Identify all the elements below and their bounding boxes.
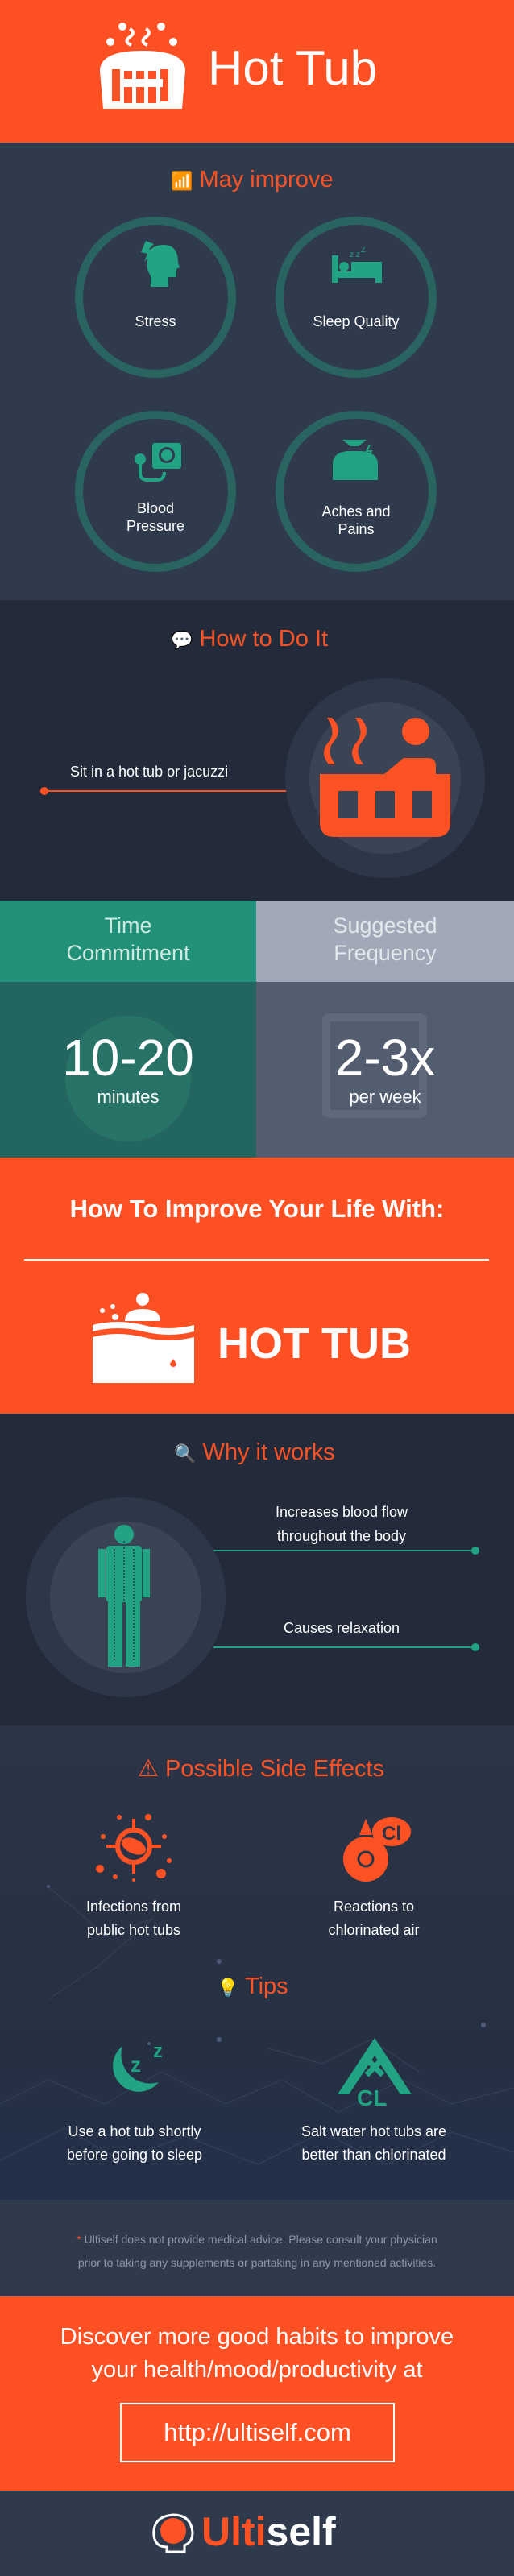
panel: suggested frequency: Frequency [334, 941, 437, 965]
text: reactions [328, 1899, 420, 1938]
circle: sleep quality: z z [350, 251, 360, 259]
heading: how to improve: How To Improve Your Life With: [70, 1195, 444, 1223]
text: sit in a hot tub: Sit in a hot tub or jacuzzi [70, 764, 228, 780]
heading: possible side effects: ⚠ Possible Side Effects [138, 1756, 384, 1782]
circle: blood pressure: Blood [137, 500, 174, 516]
panel: may improve [0, 143, 514, 600]
panel: suggested frequency: Suggested [333, 913, 437, 938]
heading: hot tub: HOT TUB [218, 1319, 411, 1368]
panel: time commitment: Time [105, 913, 151, 938]
icon: chlorine [343, 1817, 411, 1882]
header [0, 0, 514, 143]
call to action: Discover more good habits to improve [60, 2324, 454, 2350]
icon: hot tub in circles [285, 678, 485, 878]
panel: why it works [0, 1414, 514, 1725]
panel: time commitment: Commitment [66, 941, 190, 965]
circle: aches and pains: Pains [338, 521, 375, 537]
circle: blood pressure [75, 411, 236, 572]
panel: time commitment: minutes [97, 1087, 160, 1107]
icon: moon zzz [113, 2041, 163, 2092]
circle: aches and pains: Aches and [321, 503, 391, 520]
call to action: your health/mood/productivity at [91, 2357, 423, 2383]
disclaimer [0, 2200, 514, 2296]
text: infections [86, 1899, 181, 1938]
call to action [0, 2296, 514, 2491]
panel: how to do it [0, 600, 514, 901]
panel: how to improve banner [0, 1158, 514, 1414]
circle: stress: Stress [135, 313, 176, 329]
text: increases blood flow: Increases blood flow [276, 1504, 408, 1520]
panel: suggested frequency: per week [349, 1087, 421, 1107]
heading: may improve: 📶 May improve [171, 167, 333, 193]
heading: how to do it: 💬 How to Do It [171, 626, 328, 652]
icon: chlorine: Cl [382, 1823, 401, 1845]
panel: suggested frequency: 2-3x [335, 1029, 435, 1087]
icon: person in tub [93, 1293, 194, 1383]
text: increases blood flow: throughout the body [277, 1528, 406, 1544]
circle: aches and pains [276, 411, 437, 572]
icon: hot tub steam [100, 23, 185, 109]
text: infections: public hot tubs [87, 1922, 180, 1938]
url box: http://ultiself.com [164, 2418, 351, 2446]
icon: body in circles [26, 1497, 226, 1697]
network background [0, 1885, 514, 2165]
icon: virus [96, 1814, 172, 1882]
panel: time commitment [0, 901, 256, 1158]
disclaimer: prior to taking any supplements or partaking in any mentioned activities. [78, 2256, 436, 2269]
text: causes relaxation: Causes relaxation [284, 1620, 400, 1636]
text: use before sleep: before going to sleep [67, 2147, 202, 2163]
logo: Ultiself [201, 2509, 336, 2554]
panel: side effects and tips [0, 1725, 514, 2200]
text: salt water: better than chlorinated [301, 2147, 446, 2163]
circle: stress [75, 217, 236, 378]
text: reactions: Reactions to [334, 1899, 414, 1915]
disclaimer: * Ultiself does not provide medical advice. Please consult your physician [77, 2233, 437, 2246]
panel: time commitment: 10-20 [62, 1029, 194, 1087]
circle: blood pressure: Pressure [126, 518, 184, 534]
text: use before sleep [67, 2123, 202, 2163]
text: use before sleep: Use a hot tub shortly [68, 2123, 201, 2139]
url box [120, 2403, 395, 2462]
heading: tips: 💡 Tips [217, 1973, 288, 1999]
text: infections: Infections from [86, 1899, 181, 1915]
text: reactions: chlorinated air [328, 1922, 420, 1938]
panel: suggested frequency [256, 901, 514, 1158]
text: salt water: Salt water hot tubs are [301, 2123, 446, 2139]
circle: sleep quality [276, 217, 437, 378]
footer [0, 2491, 514, 2576]
text: increases blood flow [276, 1504, 408, 1544]
title: Hot Tub [208, 41, 377, 95]
icon: moon zzz: z [131, 2052, 141, 2077]
icon: no chlorine triangle [338, 2038, 412, 2107]
heading: why it works: 🔍 Why it works [174, 1439, 335, 1465]
circle: sleep quality: Sleep Quality [313, 313, 400, 329]
text: salt water [301, 2123, 446, 2163]
connector line [40, 790, 309, 792]
